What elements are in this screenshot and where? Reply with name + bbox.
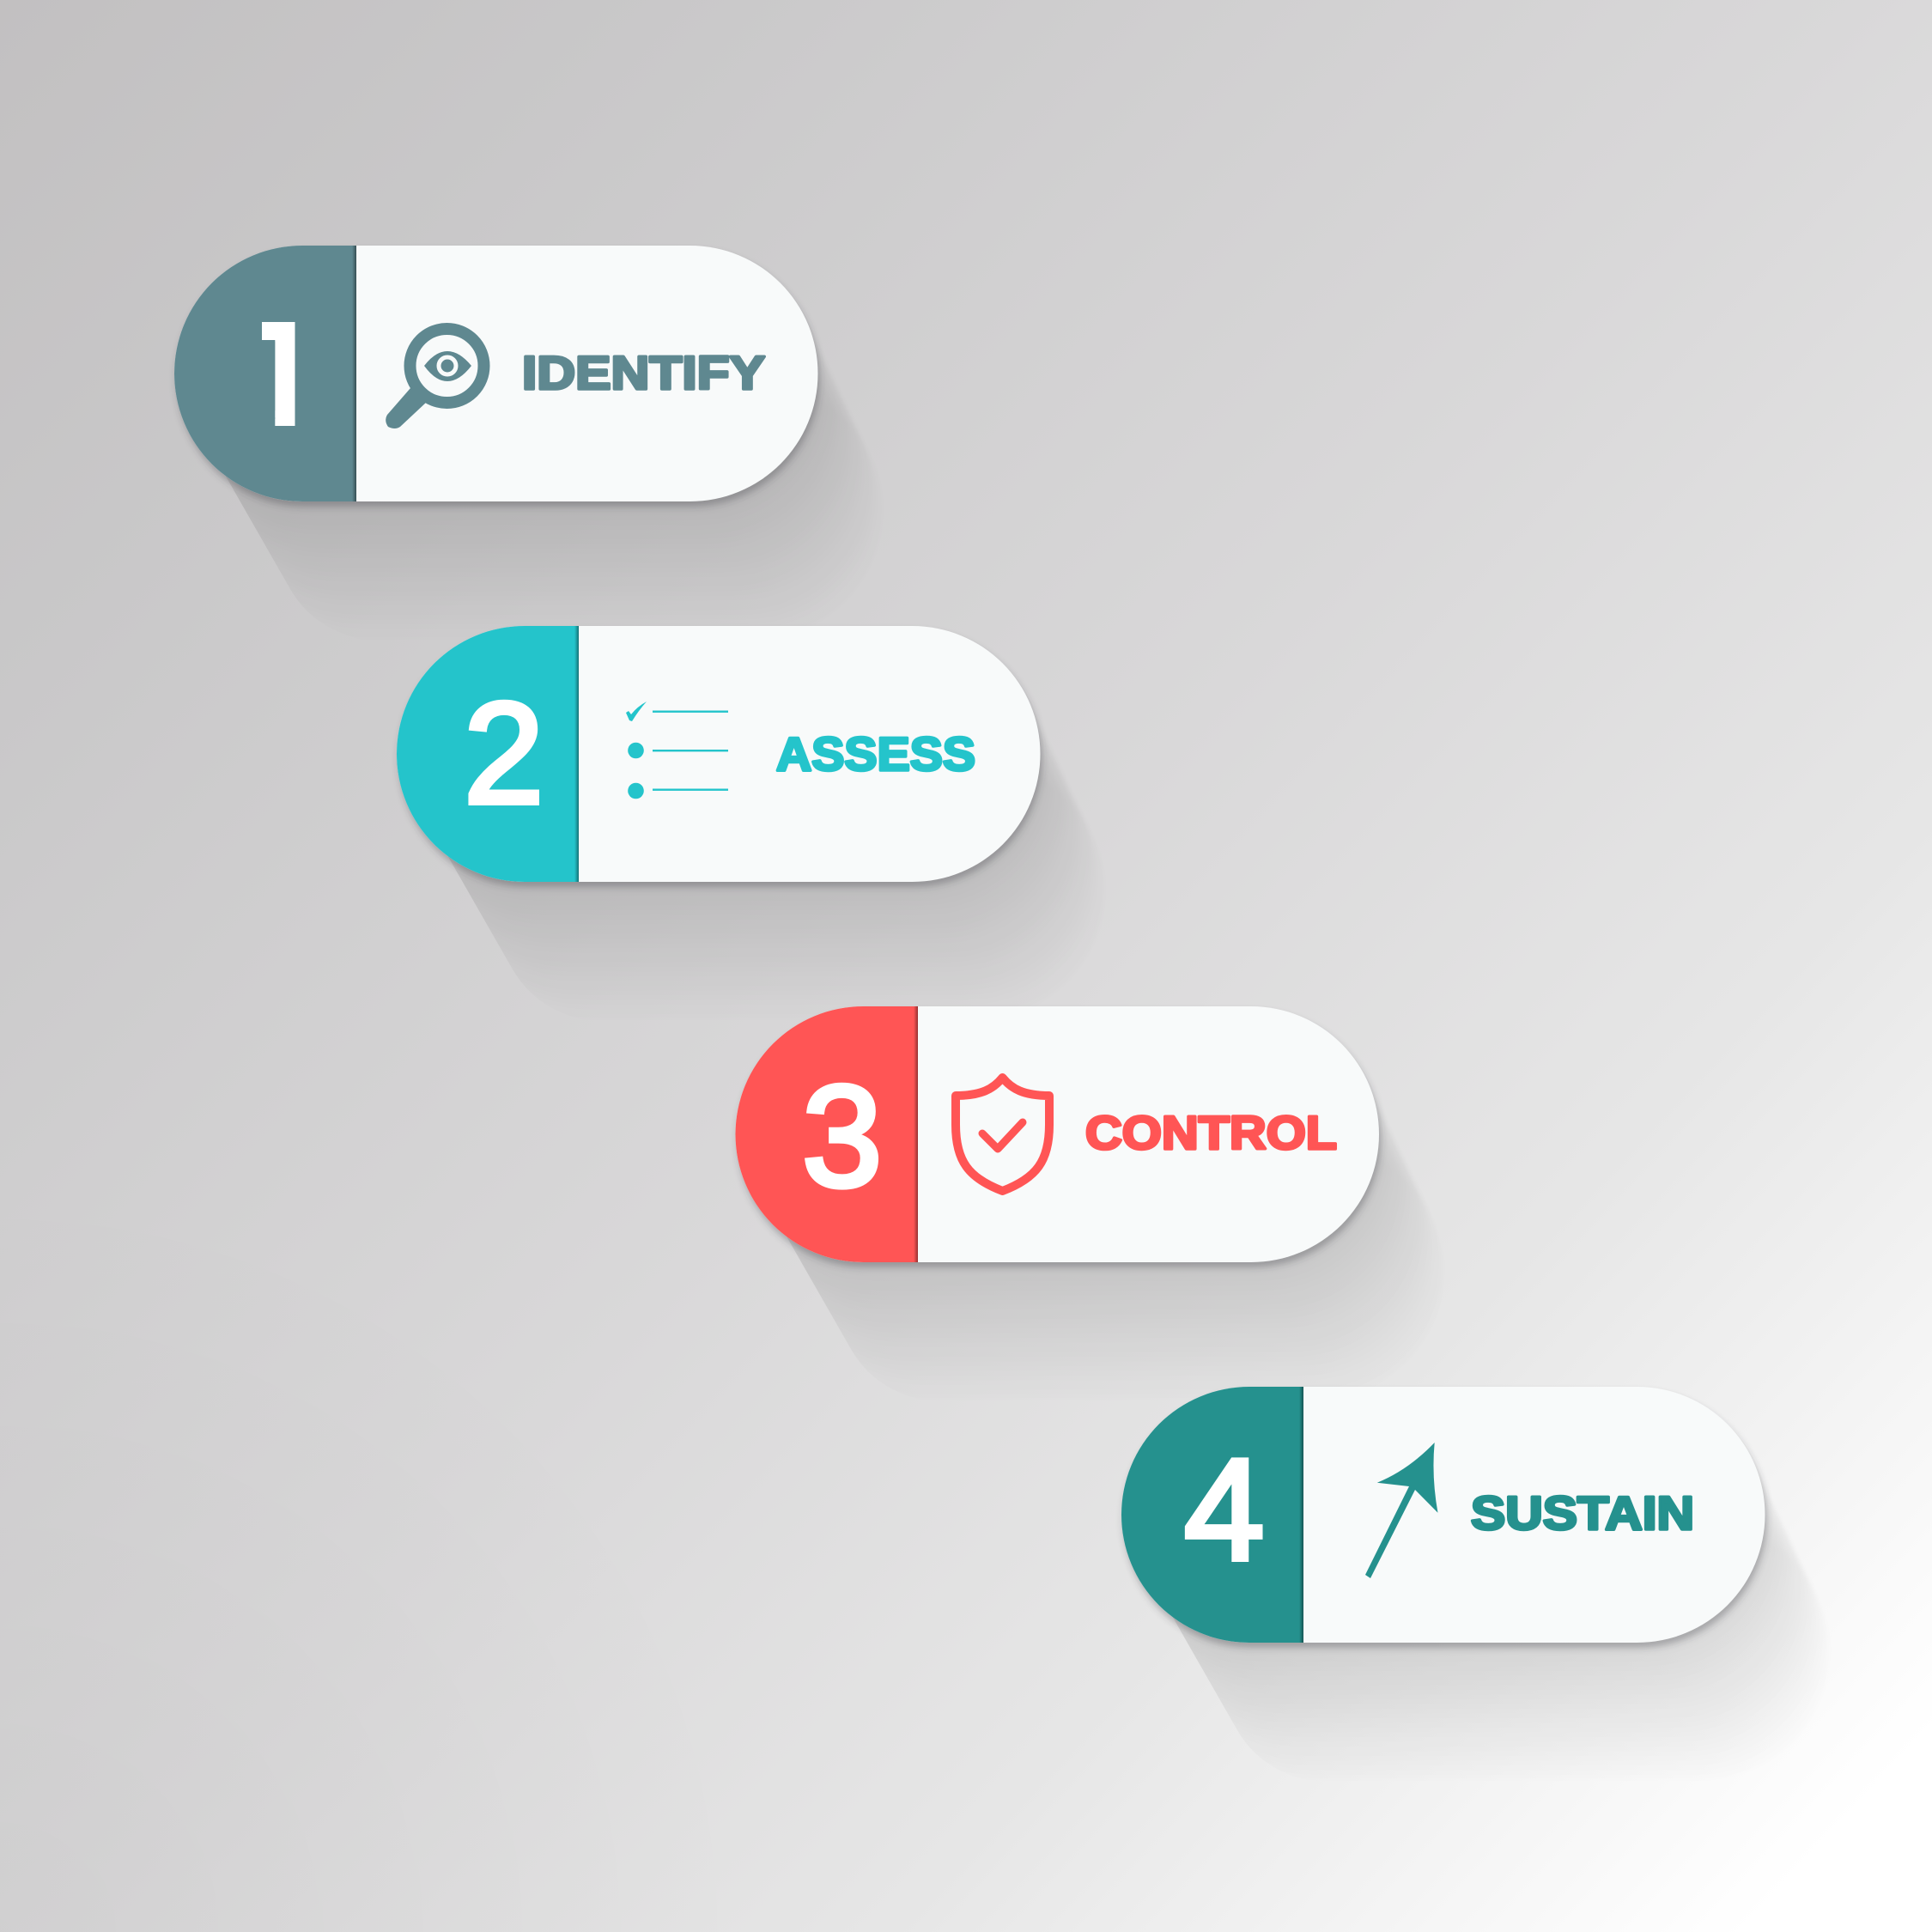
contact shadow: step 2 <box>398 631 1042 887</box>
panel: step 4 sustain <box>1121 1387 1830 1779</box>
panel: step 2 assess <box>397 626 1105 1018</box>
number 1 <box>262 322 295 426</box>
label: control: CONTROL <box>1085 1106 1337 1159</box>
label: sustain: SUSTAIN <box>1471 1486 1694 1540</box>
panel: step 1 identify <box>173 246 862 596</box>
panel: step 3 control <box>735 1006 1443 1400</box>
long shadow: step 2 <box>397 626 1105 1018</box>
number tab: step 4 <box>1121 1387 1303 1643</box>
pill body: step 2 <box>397 626 1041 882</box>
number 2: 2 <box>464 672 544 834</box>
icon: shield with check <box>956 1078 1049 1191</box>
pill body: step 1 <box>174 246 817 501</box>
label: identify: IDENTIFY <box>522 346 765 399</box>
pill body: step 4 <box>1121 1387 1765 1643</box>
pill body: step 3 <box>735 1006 1379 1262</box>
number tab: step 1 <box>174 246 356 501</box>
number tab: step 3 <box>735 1006 918 1262</box>
long shadow: step 3 <box>735 1006 1443 1400</box>
icon: checklist <box>626 702 728 799</box>
long shadow: step 4 <box>1121 1387 1830 1779</box>
contact shadow: step 3 <box>737 1012 1381 1267</box>
number tab: step 2 <box>397 626 579 882</box>
icon: magnifier with eye <box>386 329 484 428</box>
contact shadow: step 4 <box>1123 1392 1767 1648</box>
contact shadow: step 1 <box>176 251 819 507</box>
number 4: 4 <box>1184 1429 1264 1590</box>
long shadow: step 1 <box>174 246 883 639</box>
label: assess: ASSESS <box>776 727 975 781</box>
number 3: 3 <box>802 1055 882 1217</box>
number 1: 1 <box>242 291 325 459</box>
icon: arrow up <box>1365 1443 1437 1578</box>
